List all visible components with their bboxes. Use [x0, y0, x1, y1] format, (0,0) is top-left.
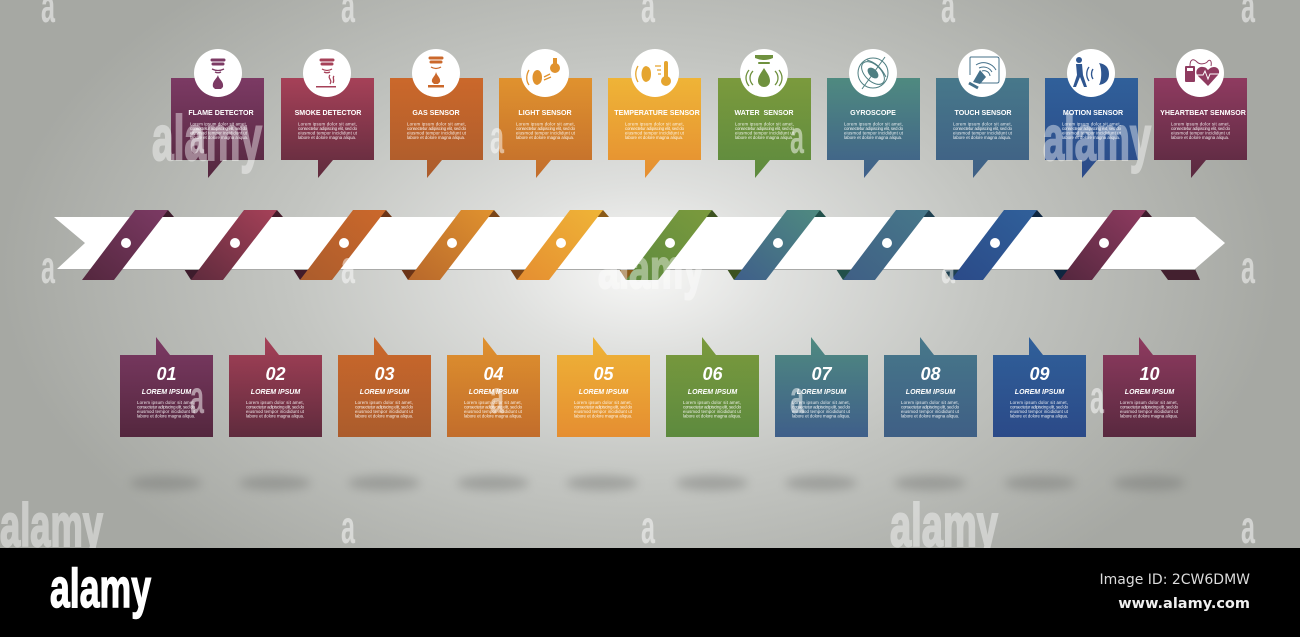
watermark words: alamy: [1043, 104, 1151, 174]
icon: gyroscope: [849, 49, 897, 97]
panel: water sensor: labore et dolore magna aliqua.: [735, 135, 793, 140]
watermark letters: a: [790, 111, 804, 163]
panel: temperature sensor: TEMPERATURE SENSOR: [614, 109, 700, 117]
panel: step 01: 01: [156, 364, 177, 384]
panel: step 09: consectetur adipiscing elit, sed do: [1010, 404, 1069, 410]
panel: gyroscope: labore et dolore magna aliqua.: [844, 135, 902, 140]
panel: step 07: LOREM IPSUM: [797, 389, 846, 396]
panel: gas sensor: Lorem ipsum dolor sit amet,: [407, 122, 466, 126]
icon: heartbeat sensor: [1176, 49, 1224, 97]
watermark letters: a: [41, 241, 55, 293]
panel: step 01: consectetur adipiscing elit, sed do: [137, 404, 196, 410]
panel: flame detector: Lorem ipsum dolor sit amet,: [190, 122, 247, 126]
panel: touch sensor: eiusmod tempor incididunt ut: [953, 130, 1013, 136]
watermark words: [0, 104, 1151, 559]
panel: motion sensor: labore et dolore magna aliqua.: [1062, 135, 1120, 140]
watermark letters: a: [790, 371, 804, 423]
panel: light sensor: [499, 78, 592, 178]
icon: water sensor: [740, 49, 788, 97]
panel: smoke detector: consectetur adipiscing elit, sed do: [298, 126, 358, 131]
panel: step 08: LOREM IPSUM: [906, 389, 955, 396]
panel: step 08: labore et dolore magna aliqua.: [901, 414, 959, 418]
panel: step 07: consectetur adipiscing elit, sed do: [792, 404, 851, 410]
panel: heartbeat sensor: consectetur adipiscing elit, sed do: [1171, 126, 1231, 131]
panel: flame detector: FLAME DETECTOR: [188, 109, 254, 117]
panel: motion sensor: Lorem ipsum dolor sit amet,: [1062, 122, 1121, 126]
panel: step 04: [447, 337, 540, 437]
panel: step 02: Lorem ipsum dolor sit amet,: [246, 400, 304, 405]
panel: smoke detector: labore et dolore magna aliqua.: [298, 135, 356, 140]
panel: step 03: LOREM IPSUM: [360, 389, 409, 396]
panel: smoke detector: eiusmod tempor incididunt ut: [298, 130, 358, 136]
panel: step 05: [557, 337, 650, 437]
icon: motion sensor: [1067, 49, 1115, 97]
panel: light sensor: Lorem ipsum dolor sit amet,: [516, 122, 575, 126]
panel: motion sensor: eiusmod tempor incididunt ut: [1062, 130, 1122, 136]
panel: touch sensor: [936, 78, 1029, 178]
panel: heartbeat sensor: eiusmod tempor incididunt ut: [1171, 130, 1231, 136]
panel: step 01: eiusmod tempor incididunt ut: [137, 409, 196, 414]
icon: light sensor: [521, 49, 569, 97]
panel: step 01: LOREM IPSUM: [142, 389, 191, 396]
panel: water sensor: eiusmod tempor incididunt ut: [735, 130, 795, 136]
panel: light sensor: eiusmod tempor incididunt ut: [516, 130, 576, 136]
ribbon straps with pins: [82, 210, 1146, 280]
panel: temperature sensor: labore et dolore magna aliqua.: [625, 135, 683, 140]
icon: temperature sensor: [631, 49, 679, 97]
watermark words: alamy: [0, 492, 103, 559]
panel: step 06: labore et dolore magna aliqua.: [683, 414, 741, 418]
panel: step 07: Lorem ipsum dolor sit amet,: [792, 400, 850, 405]
watermark words: alamy: [152, 104, 262, 174]
watermark letters: a: [490, 371, 504, 423]
watermark letters: a: [190, 371, 204, 423]
panel: flame detector: [171, 78, 264, 178]
panel: step 05: 05: [593, 364, 614, 384]
panel: smoke detector: [281, 78, 374, 178]
panel: touch sensor: TOUCH SENSOR: [954, 109, 1012, 117]
icon: smoke detector: [303, 49, 351, 97]
panel: step 02: 02: [265, 364, 286, 384]
watermark letters: a: [341, 501, 355, 553]
panel: step 01: Lorem ipsum dolor sit amet,: [137, 400, 195, 405]
panel: heartbeat sensor: YHEARTBEAT SENMSOR: [1160, 109, 1246, 117]
panel: water sensor: WATER SENSOR: [734, 109, 794, 117]
panel: step 02: eiusmod tempor incididunt ut: [246, 409, 305, 414]
panel: step 09: LOREM IPSUM: [1015, 389, 1064, 396]
panel: step 09: Lorem ipsum dolor sit amet,: [1010, 400, 1068, 405]
panel: step 06: Lorem ipsum dolor sit amet,: [683, 400, 741, 405]
panel: step 06: LOREM IPSUM: [688, 389, 737, 396]
watermark letters: a: [1090, 371, 1104, 423]
panel: gas sensor: GAS SENSOR: [412, 109, 460, 117]
panel: step 04: eiusmod tempor incididunt ut: [464, 409, 523, 414]
footer logo: alamy: [50, 557, 151, 619]
panel: temperature sensor: eiusmod tempor incididunt ut: [625, 130, 685, 136]
panel: step 02: [229, 337, 322, 437]
panel: step 07: labore et dolore magna aliqua.: [792, 414, 850, 418]
panel: water sensor: [718, 78, 811, 178]
panel: step 04: 04: [483, 364, 504, 384]
panel: step 06: eiusmod tempor incididunt ut: [683, 409, 742, 414]
icon: gas sensor: [412, 49, 460, 97]
watermark letters: a: [1241, 241, 1255, 293]
panel: step 04: LOREM IPSUM: [469, 389, 518, 396]
panel: light sensor: labore et dolore magna aliqua.: [516, 135, 574, 140]
panel: step 08: eiusmod tempor incididunt ut: [901, 409, 960, 414]
panel: step 06: consectetur adipiscing elit, sed do: [683, 404, 742, 410]
panel: step 07: eiusmod tempor incididunt ut: [792, 409, 851, 414]
panel: touch sensor: Lorem ipsum dolor sit amet,: [953, 122, 1012, 126]
panel: step 04: consectetur adipiscing elit, sed do: [464, 404, 523, 410]
panel: step 10: consectetur adipiscing elit, sed do: [1120, 404, 1179, 410]
panel: gas sensor: eiusmod tempor incididunt ut: [407, 130, 467, 136]
panel: step 03: Lorem ipsum dolor sit amet,: [355, 400, 413, 405]
panel: step 07: [775, 337, 868, 437]
panel: step 04: Lorem ipsum dolor sit amet,: [464, 400, 522, 405]
panel: step 09: eiusmod tempor incididunt ut: [1010, 409, 1069, 414]
panel: step 02: labore et dolore magna aliqua.: [246, 414, 304, 418]
panel: water sensor: consectetur adipiscing elit, sed do: [735, 126, 795, 131]
panel: flame detector: labore et dolore magna aliqua.: [190, 135, 248, 140]
panel: touch sensor: consectetur adipiscing elit, sed do: [953, 126, 1013, 131]
panel: step 03: 03: [374, 364, 395, 384]
image id: Image ID: 2CW6DMW: [1099, 572, 1250, 588]
panel: flame detector: consectetur adipiscing elit, sed do: [190, 126, 248, 131]
white arrow ribbon: [54, 217, 1225, 269]
panel: gyroscope: GYROSCOPE: [850, 109, 896, 117]
panel: step 10: eiusmod tempor incididunt ut: [1120, 409, 1179, 414]
watermark letters: a: [490, 111, 504, 163]
watermark letters: a: [341, 241, 355, 293]
panel: temperature sensor: Lorem ipsum dolor sit amet,: [625, 122, 684, 126]
watermark words: alamy: [890, 492, 998, 559]
panel: step 01: [120, 337, 213, 437]
panel: step 10: LOREM IPSUM: [1125, 389, 1174, 396]
panel: motion sensor: [1045, 78, 1138, 178]
panel: step 05: eiusmod tempor incididunt ut: [574, 409, 633, 414]
panel: step 05: LOREM IPSUM: [579, 389, 628, 396]
panel: smoke detector: Lorem ipsum dolor sit amet,: [298, 122, 357, 126]
panel: gyroscope: consectetur adipiscing elit, sed do: [844, 126, 904, 131]
panel: step 08: Lorem ipsum dolor sit amet,: [901, 400, 959, 405]
ribbon back folds: [160, 210, 1200, 280]
panel: step 03: [338, 337, 431, 437]
watermark letters: a: [1241, 501, 1255, 553]
panel: motion sensor: consectetur adipiscing elit, sed do: [1062, 126, 1122, 131]
panel: touch sensor: labore et dolore magna aliqua.: [953, 135, 1011, 140]
panel: gyroscope: eiusmod tempor incididunt ut: [844, 130, 904, 136]
panel: step 08: 08: [920, 364, 941, 384]
panel: step 06: [666, 337, 759, 437]
icon: touch sensor: [958, 49, 1006, 97]
panel: step 09: labore et dolore magna aliqua.: [1010, 414, 1068, 418]
footer bar: [0, 548, 1300, 637]
panel: heartbeat sensor: labore et dolore magna aliqua.: [1171, 135, 1229, 140]
panel: step 05: consectetur adipiscing elit, sed do: [574, 404, 633, 410]
panel: step 07: 07: [811, 364, 832, 384]
panel: step 06: 06: [702, 364, 723, 384]
panel: gyroscope: Lorem ipsum dolor sit amet,: [844, 122, 903, 126]
icon: flame detector: [194, 49, 242, 97]
panel: step 01: labore et dolore magna aliqua.: [137, 414, 195, 418]
panel: heartbeat sensor: Lorem ipsum dolor sit amet,: [1171, 122, 1230, 126]
website: www.alamy.com: [1118, 596, 1250, 612]
panel: step 05: labore et dolore magna aliqua.: [574, 414, 632, 418]
panel: step 02: consectetur adipiscing elit, sed do: [246, 404, 305, 410]
panel: flame detector: eiusmod tempor incididunt ut: [190, 130, 248, 136]
panel: step 03: eiusmod tempor incididunt ut: [355, 409, 414, 414]
panel: step 04: labore et dolore magna aliqua.: [464, 414, 522, 418]
panel: step 10: Lorem ipsum dolor sit amet,: [1120, 400, 1178, 405]
panel: gyroscope: [827, 78, 920, 178]
panel: step 08: [884, 337, 977, 437]
watermark words: alamy: [598, 237, 704, 300]
panel: light sensor: LIGHT SENSOR: [518, 109, 572, 117]
panel: step 02: LOREM IPSUM: [251, 389, 300, 396]
watermark letters: a: [641, 501, 655, 553]
panel: step 10: labore et dolore magna aliqua.: [1120, 414, 1178, 418]
panel: gas sensor: consectetur adipiscing elit, sed do: [407, 126, 467, 131]
watermark letters: a: [190, 111, 204, 163]
panel: smoke detector: SMOKE DETECTOR: [295, 109, 361, 117]
panel: temperature sensor: [608, 78, 701, 178]
panel: motion sensor: MOTION SENSOR: [1063, 109, 1123, 117]
panel: heartbeat sensor: [1154, 78, 1247, 178]
panel: gas sensor: labore et dolore magna aliqua.: [407, 135, 465, 140]
panel: gas sensor: [390, 78, 483, 178]
floor shadows: [130, 476, 1185, 490]
watermark letters: a: [941, 241, 955, 293]
panel: step 10: [1103, 337, 1196, 437]
panel: light sensor: consectetur adipiscing elit, sed do: [516, 126, 576, 131]
panel: step 08: consectetur adipiscing elit, sed do: [901, 404, 960, 410]
panel: step 03: consectetur adipiscing elit, sed do: [355, 404, 414, 410]
panel: temperature sensor: consectetur adipiscing elit, sed do: [625, 126, 685, 131]
panel: water sensor: Lorem ipsum dolor sit amet,: [735, 122, 794, 126]
panel: step 03: labore et dolore magna aliqua.: [355, 414, 413, 418]
panel: step 05: Lorem ipsum dolor sit amet,: [574, 400, 632, 405]
panel: step 09: [993, 337, 1086, 437]
panel: step 10: 10: [1139, 364, 1160, 384]
panel: step 09: 09: [1029, 364, 1050, 384]
